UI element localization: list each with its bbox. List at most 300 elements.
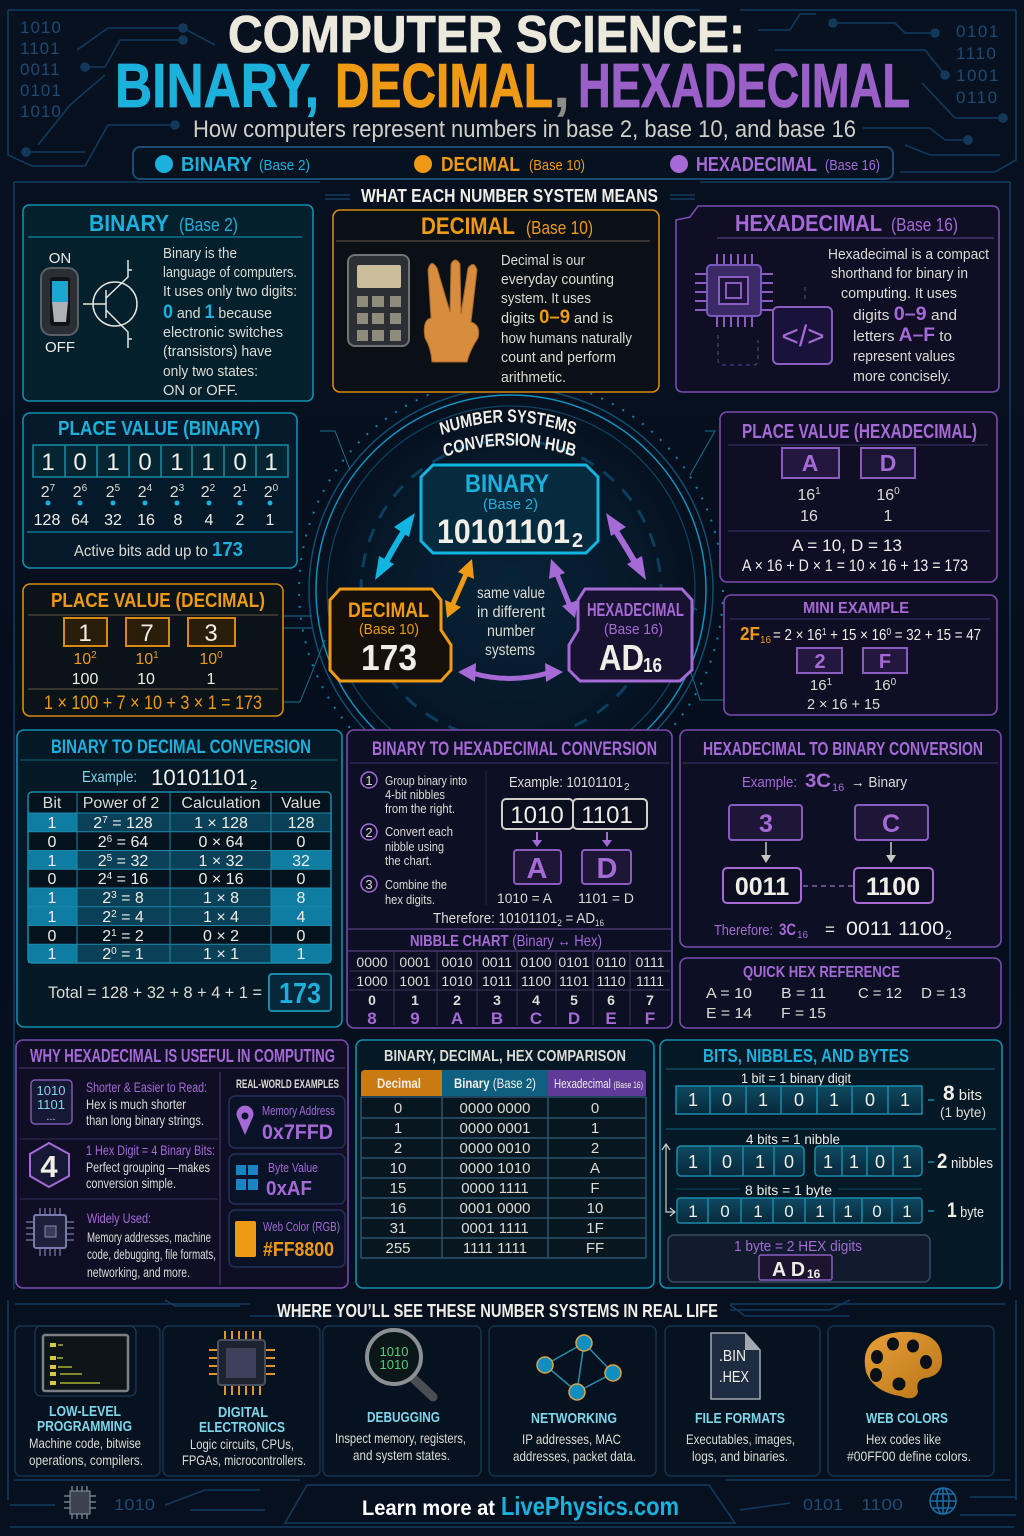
central hub rings xyxy=(283,378,724,802)
conversion table: 0 × 64 xyxy=(199,834,244,851)
panel: hexadecimal definition xyxy=(676,206,999,392)
icon: code window xyxy=(718,287,832,365)
conversion table: 0 xyxy=(297,928,306,945)
reason: grouping: 1 Hex Digit = 4 Binary Bits: xyxy=(86,1142,215,1158)
hex letter values: A = 10 xyxy=(706,985,752,1002)
conversion table: 2 xyxy=(102,928,111,945)
equation: 2F xyxy=(740,624,760,644)
footer binary right: 1100 xyxy=(861,1497,903,1514)
arrow: nibble to byte bracket xyxy=(662,1144,675,1216)
step 2 xyxy=(361,824,453,868)
powers of two: 2 xyxy=(170,484,179,501)
comparison table: 0000 0000 xyxy=(460,1100,530,1117)
byte row xyxy=(676,1182,984,1223)
step 3: hex digits. xyxy=(385,892,435,907)
bit cells: 1 xyxy=(170,449,184,476)
powers of two xyxy=(41,483,279,501)
legend bar: BINARY xyxy=(181,154,253,176)
nibble chart: 8 xyxy=(367,1009,377,1028)
place values: 16 xyxy=(810,677,827,694)
conversion table: = 128 xyxy=(108,815,153,832)
arrow: binary to hexadecimal xyxy=(606,513,646,580)
bit row: 8 bits xyxy=(943,1082,982,1105)
label: #00FF00 define colors. xyxy=(847,1448,971,1464)
conversion table: 1 xyxy=(111,928,117,939)
legend bar: DECIMAL xyxy=(441,154,520,176)
bit cells: 0 xyxy=(233,449,247,476)
powers of two: 2 xyxy=(233,484,242,501)
panel: bits, nibbles and bytes xyxy=(660,1040,1002,1288)
card: memory address xyxy=(229,1096,345,1148)
link text: LivePhysics.com xyxy=(501,1491,679,1521)
legend bar: (Base 2) xyxy=(259,157,310,174)
decimal expansion: 1 × 100 + 7 × 10 + 3 × 1 = 173 xyxy=(44,693,262,714)
place values: 8 xyxy=(174,512,183,529)
reason: widely used xyxy=(87,1210,216,1280)
comparison table: 0 xyxy=(394,1100,402,1117)
binary description: electronic switches xyxy=(163,324,283,341)
powers of ten: 2 xyxy=(91,650,97,661)
hex letter values: B = 11 xyxy=(781,985,826,1002)
card: web color: #FF8800 xyxy=(263,1239,334,1261)
step 3: Combine the xyxy=(385,877,447,892)
arrow: binary to decimal inner xyxy=(445,559,474,618)
legend bar: (Base 16) xyxy=(825,157,880,174)
binary code decoration right: 1110 xyxy=(956,44,997,63)
arrow: hex to binary inner xyxy=(549,559,578,618)
example: Example: xyxy=(742,774,797,791)
nibble chart: 1111 xyxy=(636,973,664,989)
hub node: decimal: 173 xyxy=(361,637,417,678)
binary card heading: BINARY xyxy=(89,210,169,236)
conversion table: 2 xyxy=(93,815,102,832)
card: debugging xyxy=(323,1326,481,1476)
nibble row: 0 xyxy=(722,1152,732,1172)
reason: shorter: Hex is much shorter xyxy=(86,1096,186,1112)
icon: hexagon four xyxy=(30,1143,69,1187)
result: 2 xyxy=(945,928,952,942)
nibble chart: 1011 xyxy=(482,973,512,989)
label: IP addresses, MAC xyxy=(522,1431,621,1447)
conversion table: 1 xyxy=(48,853,57,870)
heading: BINARY, DECIMAL, HEX COMPARISON xyxy=(384,1048,626,1065)
digit cells xyxy=(797,648,907,673)
bit row xyxy=(676,1070,986,1120)
label: addresses, packet data. xyxy=(513,1448,636,1464)
heading: BINARY TO HEXADECIMAL CONVERSION xyxy=(372,739,657,760)
nibble row: 4 bits = 1 nibble xyxy=(746,1131,840,1147)
place values: 16 xyxy=(874,677,891,694)
result: = AD xyxy=(562,910,595,927)
binary card heading: (Base 2) xyxy=(179,215,238,235)
card: byte value: Byte Value xyxy=(268,1160,318,1175)
nibble row: 1 xyxy=(823,1152,833,1172)
equation: = 32 + 15 = 47 xyxy=(891,627,981,644)
icon: network xyxy=(537,1335,621,1400)
comparison table: 1 xyxy=(591,1120,599,1137)
bit row: 0 xyxy=(865,1090,875,1110)
panel: quick hex reference xyxy=(680,958,1001,1028)
bit row: 1 xyxy=(688,1090,698,1110)
powers of sixteen: 1 xyxy=(884,508,893,525)
hex letter values: D = 13 xyxy=(921,985,966,1002)
icon: binary card: 1010 xyxy=(37,1083,65,1098)
bit cells: 1 xyxy=(201,449,215,476)
footer binary right xyxy=(803,1497,903,1514)
hex letter values: F = 15 xyxy=(781,1005,826,1022)
nibble chart: E xyxy=(605,1009,617,1028)
conversion table: 1 × 32 xyxy=(199,853,244,870)
hex expansion: A = 10, D = 13 xyxy=(792,536,902,555)
card: memory address: Memory Address xyxy=(262,1103,335,1118)
hex digit cells: 3 xyxy=(759,810,773,838)
place values xyxy=(34,512,275,529)
comparison table: A xyxy=(590,1160,600,1177)
comparison table: 0000 1010 xyxy=(460,1160,530,1177)
label: Inspect memory, registers, xyxy=(335,1430,466,1446)
digit cells: F xyxy=(879,651,891,673)
hexadecimal description: digits 0–9 and xyxy=(853,304,957,325)
binary description: only two states: xyxy=(163,363,258,380)
hex card heading: (Base 16) xyxy=(891,215,958,235)
title: , xyxy=(553,52,570,121)
nibble chart: 0000 xyxy=(356,954,388,970)
panel: binary to decimal conversion xyxy=(17,730,342,1027)
nibble chart: 6 xyxy=(607,992,615,1008)
nibble chart xyxy=(349,952,670,1028)
icon: small chip xyxy=(26,1208,74,1256)
hex card heading xyxy=(717,210,994,238)
binary code decoration right: 0110 xyxy=(956,88,999,107)
nibble row: 0 xyxy=(875,1152,885,1172)
powers of ten: 1 xyxy=(153,650,159,661)
hub node: binary: (Base 2) xyxy=(483,496,538,513)
hub node: hexadecimal: HEXADECIMAL xyxy=(587,600,684,620)
conversion table: 128 xyxy=(288,815,314,832)
example xyxy=(82,765,257,792)
hub node: binary: BINARY xyxy=(465,470,549,498)
conversion table: 2 xyxy=(102,909,111,926)
conversion table: = 32 xyxy=(112,853,148,870)
heading: MINI EXAMPLE xyxy=(803,600,909,617)
place values: 32 xyxy=(104,512,122,529)
conversion table: 3 xyxy=(111,890,117,901)
decimal card heading: (Base 10) xyxy=(526,218,593,238)
label: WEB COLORS xyxy=(866,1410,948,1427)
panel: place value hexadecimal xyxy=(720,412,997,582)
label: LOW-LEVEL xyxy=(49,1403,121,1420)
byte row: 1 xyxy=(902,1202,912,1221)
hub node: hexadecimal xyxy=(569,589,692,681)
powers of two: 4 xyxy=(147,483,153,494)
comparison table: Binary (Base 2) xyxy=(454,1075,536,1091)
powers of two: 2 xyxy=(210,483,216,494)
subtitle: How computers represent numbers in base 2, base 10, and base 16 xyxy=(193,116,856,143)
decimal description: everyday counting xyxy=(501,271,614,288)
result xyxy=(714,919,952,942)
reason: shorter: than long binary strings. xyxy=(86,1112,204,1128)
digit cells: 3 xyxy=(204,620,218,647)
worked example: D xyxy=(597,853,617,885)
equation: 0 xyxy=(886,627,891,638)
hub node: decimal: DECIMAL xyxy=(348,599,429,622)
powers of ten: 10 xyxy=(135,651,153,668)
label xyxy=(335,1409,466,1463)
byte row: 0 xyxy=(720,1202,730,1221)
nibble chart: 3 xyxy=(493,992,501,1008)
result: 16 xyxy=(595,918,604,928)
nibble chart: 0101 xyxy=(558,954,590,970)
label xyxy=(513,1410,636,1464)
hex digit cells: D xyxy=(880,450,896,476)
icon: magnifier: 1010 xyxy=(380,1344,408,1359)
central hub heading xyxy=(439,409,576,456)
comparison table: 0001 1111 xyxy=(461,1220,529,1237)
hex digit cells xyxy=(729,805,928,863)
bit row: 1 xyxy=(758,1090,768,1110)
hex letter values xyxy=(706,985,966,1022)
hex expansion xyxy=(742,536,968,575)
card: networking xyxy=(489,1326,656,1476)
powers of ten: 0 xyxy=(217,650,223,661)
binary description: ON or OFF. xyxy=(163,382,238,399)
conversion table: 1 xyxy=(48,815,57,832)
panel: hexadecimal to binary conversion xyxy=(680,730,1001,947)
place values: 128 xyxy=(34,512,60,529)
panel: place value binary xyxy=(23,413,297,568)
byte row: 8 bits = 1 byte xyxy=(745,1182,832,1198)
binary description: 0 and 1 because xyxy=(163,302,272,323)
hexadecimal description: letters A–F to xyxy=(853,325,952,346)
conversion table: 7 xyxy=(102,815,108,826)
conversion table: 2 xyxy=(111,909,117,920)
nibble chart: A xyxy=(451,1009,463,1028)
reason: widely used: networking, and more. xyxy=(87,1264,190,1280)
comparison table: 31 xyxy=(390,1220,406,1237)
nibble chart: 2 xyxy=(453,992,461,1008)
nibble chart: 1000 xyxy=(356,973,388,989)
comparison table: 1111 1111 xyxy=(463,1240,527,1257)
reason: grouping xyxy=(86,1142,215,1191)
nibble chart: 0 xyxy=(368,992,376,1008)
nibble chart: 0001 xyxy=(399,954,431,970)
label xyxy=(686,1410,795,1464)
nibble chart: 1101 xyxy=(559,973,589,989)
comparison table: 0000 0010 xyxy=(460,1140,530,1157)
result: 0011 1100 xyxy=(846,919,944,940)
byte row: 1 xyxy=(688,1202,698,1221)
label: operations, compilers. xyxy=(29,1452,143,1468)
decimal description: system. It uses xyxy=(501,290,591,307)
nibble row: 1 xyxy=(849,1152,859,1172)
reason: widely used: Memory addresses, machine xyxy=(87,1229,211,1245)
conversion table: = 1 xyxy=(117,946,144,963)
icon: chip xyxy=(209,1331,275,1395)
label: FPGAs, microcontrollers. xyxy=(182,1452,306,1468)
label xyxy=(847,1410,971,1464)
decimal description: Decimal is our xyxy=(501,252,585,269)
footer binary left: 1010 xyxy=(114,1497,155,1514)
place values: 1 xyxy=(207,671,216,688)
hex expansion: A × 16 + D × 1 = 10 × 16 + 13 = 173 xyxy=(742,556,968,575)
place values xyxy=(807,677,897,713)
nibble chart: 5 xyxy=(570,992,578,1008)
conversion table: 1 × 1 xyxy=(203,946,239,963)
hub node: decimal xyxy=(330,589,451,681)
powers of sixteen xyxy=(797,486,900,525)
comparison table: 10 xyxy=(390,1160,406,1177)
byte row: 1 xyxy=(843,1202,853,1221)
nibble chart: 0100 xyxy=(520,954,552,970)
conversion table: 4 xyxy=(107,871,113,882)
powers of two: 5 xyxy=(115,483,121,494)
powers of ten: 10 xyxy=(199,651,217,668)
powers of two: 2 xyxy=(201,484,210,501)
hub node: binary: 2 xyxy=(572,530,583,552)
icon: palette xyxy=(865,1332,942,1398)
example: 16 xyxy=(832,782,844,794)
equation: 1 xyxy=(822,627,827,638)
label: NETWORKING xyxy=(531,1410,617,1427)
binary description xyxy=(163,245,297,399)
nibble chart: 0010 xyxy=(441,954,473,970)
powers of two: 1 xyxy=(242,483,248,494)
digit cells: 2 xyxy=(814,651,826,673)
hex digit cells: A xyxy=(802,450,818,476)
nibble row: 1 xyxy=(688,1152,698,1172)
label: Executables, images, xyxy=(686,1431,795,1447)
heading: BINARY TO DECIMAL CONVERSION xyxy=(51,737,311,758)
step 2: Convert each xyxy=(385,824,453,839)
footer binary right: 0101 xyxy=(803,1497,843,1514)
comparison table: 1F xyxy=(586,1220,604,1237)
nibble row: 1 xyxy=(902,1152,912,1172)
icon: on/off switch: OFF xyxy=(45,339,75,356)
equation: 16 xyxy=(760,635,772,646)
step 1: Group binary into xyxy=(385,773,467,788)
place values: 16 xyxy=(137,512,155,529)
worked example: 2 xyxy=(624,782,630,793)
conversion table: Calculation xyxy=(181,795,261,812)
example: 10101101 xyxy=(151,765,248,790)
bit cells: 0 xyxy=(138,449,152,476)
worked example: 1101 = D xyxy=(578,890,634,906)
binary nibble cells: 1100 xyxy=(866,873,920,901)
hexadecimal description: more concisely. xyxy=(853,368,951,385)
bit cells: 1 xyxy=(41,449,55,476)
comparison table: 255 xyxy=(385,1240,411,1257)
icon: on/off switch: ON xyxy=(49,250,71,267)
powers of two: 0 xyxy=(273,483,279,494)
binary description: (transistors) have xyxy=(163,343,272,360)
binary nibble cells xyxy=(723,868,933,903)
comparison table: Hexadecimal (Base 16) xyxy=(554,1076,643,1091)
hex letter values: C = 12 xyxy=(858,985,902,1002)
label: Hex codes like xyxy=(866,1431,941,1447)
result: Therefore: xyxy=(714,922,773,939)
powers of two: 2 xyxy=(41,484,50,501)
conversion table: 0 xyxy=(48,928,57,945)
comparison table: 0 xyxy=(591,1100,599,1117)
comparison table: Decimal xyxy=(377,1075,421,1091)
comparison table: 10 xyxy=(587,1200,603,1217)
hub node: hexadecimal: (Base 16) xyxy=(604,621,663,638)
powers of ten xyxy=(73,650,223,668)
nibble chart: 4 xyxy=(532,992,540,1008)
icon: calculator xyxy=(348,255,409,346)
nibble row xyxy=(677,1131,993,1176)
binary nibble cells: 0011 xyxy=(735,873,789,901)
powers of two: 2 xyxy=(264,484,273,501)
icon: file xyxy=(711,1333,760,1399)
card: byte value: 0xAF xyxy=(266,1178,312,1200)
equation: = 2 × 16 xyxy=(773,627,832,644)
place values: 4 xyxy=(205,512,214,529)
label: DEBUGGING xyxy=(367,1409,440,1426)
nibble row: 0 xyxy=(784,1152,794,1172)
panel: binary definition xyxy=(23,205,313,401)
worked example: 1010 = A xyxy=(497,890,553,906)
label: FILE FORMATS xyxy=(695,1410,785,1427)
worked example xyxy=(497,774,647,906)
hub node: decimal: (Base 10) xyxy=(359,621,419,638)
conversion table: 2 xyxy=(98,834,107,851)
hub node: binary xyxy=(421,465,598,553)
comparison table: 2 xyxy=(591,1140,599,1157)
place values: 2 × 16 + 15 xyxy=(807,696,880,713)
reason: widely used: code, debugging, file formats, xyxy=(87,1246,216,1262)
nibble chart: 1 xyxy=(411,992,419,1008)
conversion table: = 64 xyxy=(112,834,148,851)
hex digits box: A D xyxy=(772,1259,805,1281)
total: 173 xyxy=(279,978,321,1010)
result: 3C xyxy=(779,920,796,939)
heading: PLACE VALUE (BINARY) xyxy=(58,418,260,440)
panel: quick hex reference: QUICK HEX REFERENCE xyxy=(743,964,900,981)
binary code decoration left: 1010 xyxy=(20,18,62,37)
conversion table: 2 xyxy=(98,871,107,888)
bit row: 1 xyxy=(829,1090,839,1110)
icon: hand showing three fingers xyxy=(424,260,479,362)
icon: file: .HEX xyxy=(719,1369,749,1386)
nibble chart: 1010 xyxy=(441,973,473,989)
hub caption: number xyxy=(487,623,536,640)
hub node: hexadecimal: 16 xyxy=(643,655,662,677)
conversion table: 4 xyxy=(297,909,306,926)
total: Total = 128 + 32 + 8 + 4 + 1 = xyxy=(48,983,262,1002)
conversion table: = 16 xyxy=(112,871,148,888)
conversion table: 0 xyxy=(111,946,117,957)
icon: magnifier: 1010 xyxy=(380,1357,408,1372)
hexadecimal description xyxy=(828,246,990,385)
comparison table xyxy=(361,1070,646,1258)
result: = xyxy=(825,920,835,939)
conversion table: 6 xyxy=(107,834,113,845)
equation: + 15 × 16 xyxy=(826,627,887,644)
panel: mini example xyxy=(724,595,997,715)
byte row: 1 xyxy=(753,1202,763,1221)
nibble row: 1 xyxy=(755,1152,765,1172)
bit row: 1 bit = 1 binary digit xyxy=(741,1070,851,1086)
place values: 10 xyxy=(137,671,155,688)
conversion table: 8 xyxy=(297,890,306,907)
conversion table: = 8 xyxy=(117,890,144,907)
hexadecimal description: computing. It uses xyxy=(841,285,957,302)
conversion table: Power of 2 xyxy=(83,795,159,812)
bit cells: 1 xyxy=(264,449,278,476)
binary code decoration left xyxy=(20,18,62,121)
powers of two: 7 xyxy=(50,483,56,494)
